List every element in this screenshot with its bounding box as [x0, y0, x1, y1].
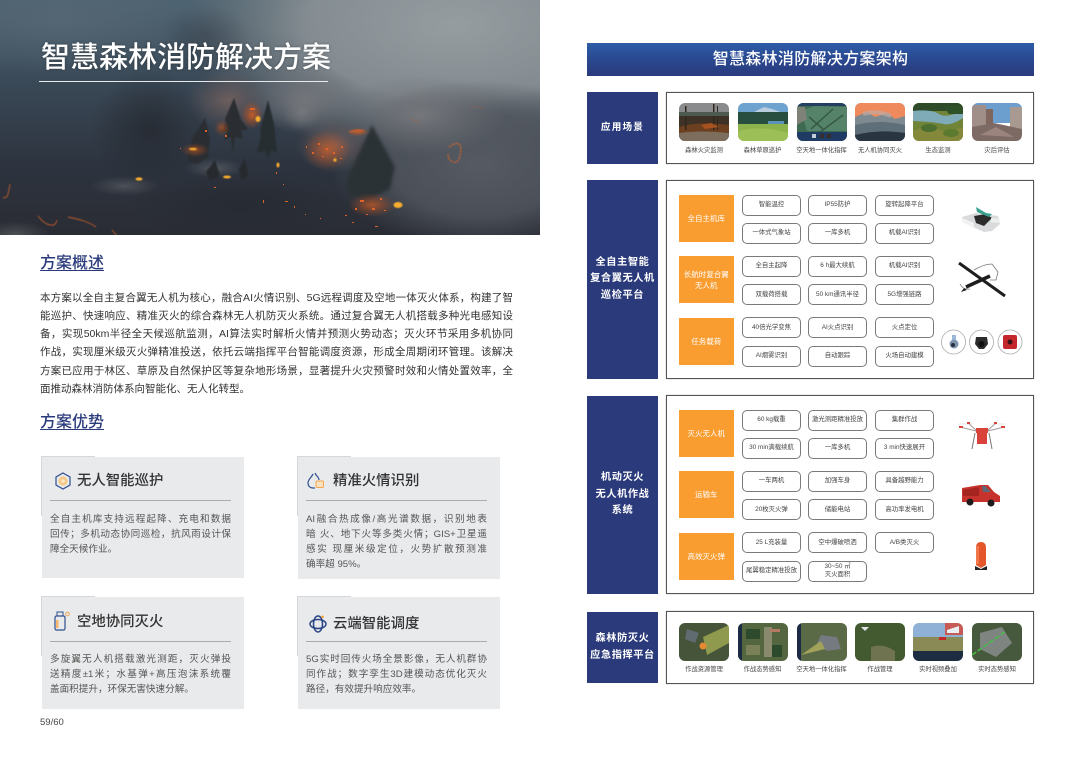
spec — [742, 438, 801, 458]
label: 作战管理 — [867, 666, 893, 673]
icon: orbit — [309, 615, 327, 633]
spec — [808, 346, 867, 366]
spec: 双载荷搭载 — [756, 290, 787, 298]
card text: 路径，有效提升响应效率。 — [306, 684, 421, 694]
icon: firefighting drone — [959, 422, 1005, 450]
spec: AI火点识别 — [822, 324, 853, 330]
block: transport vehicle: 运输车 — [695, 490, 718, 499]
spec: 60 kg载重 — [757, 416, 786, 423]
spec: 火点定位 — [892, 324, 917, 330]
spec — [875, 438, 934, 458]
card text: 送精度±1米；水基弹+高压泡沫系统覆 — [50, 668, 231, 680]
card heading: 精准火情识别 — [333, 473, 419, 489]
card text: AI融合热成像/高光谱数据，识别地表 — [306, 514, 487, 524]
block: long endurance drone: 无人机 — [695, 280, 718, 290]
panel: emergency command platform — [666, 611, 1034, 684]
spec: 30 min满载续航 — [749, 444, 794, 451]
spec: 储能电站 — [825, 506, 850, 512]
spec: 智能温控 — [759, 201, 784, 208]
thumbnail: situation awareness — [738, 623, 788, 661]
spec: 30~50 ㎡ — [824, 563, 851, 570]
card text — [306, 514, 487, 570]
spec — [808, 222, 867, 244]
card text: 5G实时回传火场全景影像，无人机群协 — [306, 654, 487, 664]
spec: 自动跟踪 — [825, 352, 850, 359]
spec — [742, 317, 801, 338]
spec — [875, 194, 934, 216]
title underline — [39, 80, 328, 82]
spec: 一车两机 — [759, 477, 784, 484]
block: fire bomb: 高效灭火弹 — [688, 552, 725, 561]
spec — [875, 222, 934, 244]
panel: card autonomous patrol — [42, 457, 244, 578]
thumbnail: live video overlay — [913, 623, 963, 661]
label: autonomous inspection platform — [587, 180, 658, 379]
spec: 尾翼稳定精准投放 — [746, 567, 797, 574]
panel: application scenes — [666, 92, 1034, 164]
spec — [875, 470, 934, 492]
spec — [808, 194, 867, 216]
panel: card fire identification — [298, 457, 500, 579]
block: firefighting drone — [678, 410, 734, 457]
spec: 20枚灭火弹 — [755, 506, 788, 512]
spec — [808, 438, 867, 458]
label: 无人机协同灭火 — [858, 147, 902, 154]
spec: 集群作战 — [892, 416, 917, 423]
spec: AI烟雾识别 — [756, 352, 787, 359]
spec — [742, 284, 801, 305]
label: application scenes — [587, 92, 658, 164]
label: application scenes: 应用场景 — [601, 122, 644, 133]
spec — [742, 256, 801, 276]
spec — [742, 194, 801, 216]
block: long endurance drone — [678, 256, 734, 303]
card heading: 云端智能调度 — [333, 616, 419, 632]
divider — [306, 500, 487, 501]
block: firefighting drone: 灭火无人机 — [688, 429, 725, 438]
thumbnail: post-disaster assessment — [972, 103, 1022, 141]
spec — [742, 222, 801, 244]
spec — [742, 346, 801, 366]
icon: drone dock — [962, 207, 1000, 232]
block: long endurance drone: 长航时复合翼 — [684, 270, 729, 278]
card text: 全自主机库支持远程起降、充电和数据 — [50, 514, 231, 524]
spec: 一库多机 — [825, 444, 850, 451]
card text: 回传；多机动态协同巡检，抗风雨设计保 — [50, 528, 231, 540]
card text: 同作战；数字孪生3D建模动态优化灭火 — [306, 668, 487, 680]
block: mission payload — [678, 318, 734, 365]
card text: 障全天候作业。 — [50, 544, 117, 554]
architecture title banner: 智慧森林消防解决方案架构 — [713, 51, 908, 68]
block: mission payload: 任务载荷 — [691, 337, 721, 346]
spec — [808, 410, 867, 430]
fire glow — [241, 101, 263, 129]
spec — [808, 317, 867, 338]
thumbnail: forest fire monitoring — [679, 103, 729, 141]
label: 灾后评估 — [984, 147, 1010, 154]
spec — [808, 470, 867, 492]
label: mobile firefighting system: 无人机作战 — [596, 489, 649, 500]
spec — [875, 499, 934, 520]
spec: 火场自动建模 — [885, 352, 924, 359]
thumbnail: resource management — [679, 623, 729, 661]
card text — [50, 654, 231, 694]
text block: overview paragraph: 备，实现50km半径全天候巡航监测，AI算法实时解析火情并预测火势动态；灭火环节采用多机协同 — [40, 328, 513, 340]
label: 森林火灾监测 — [685, 147, 723, 154]
spec: 一库多机 — [825, 229, 850, 236]
text block: overview paragraph: 能巡护、快速响应、精准灭火的综合森林无人机防灭火系统。通过复合翼无人机搭载多种光电感知设 — [40, 310, 513, 322]
architecture title banner — [587, 43, 1034, 76]
spec — [875, 284, 934, 305]
label: 生态监测 — [925, 147, 951, 154]
spec — [742, 532, 801, 553]
spec — [808, 284, 867, 305]
page number: 59/60 — [40, 717, 64, 728]
spec: 6 h最大续航 — [820, 262, 855, 269]
icon: hexagon — [55, 472, 71, 490]
heading: advantages: 方案优势 — [40, 414, 104, 431]
spec — [742, 560, 801, 582]
card heading: 空地协同灭火 — [77, 614, 163, 630]
spec: 灭火面积 — [825, 571, 850, 578]
spec: A/B类灭火 — [890, 538, 919, 546]
spec — [742, 499, 801, 520]
label: autonomous inspection platform: 全自主智能 — [596, 257, 649, 268]
spec: 5G增强链路 — [887, 290, 922, 298]
icon: fire bomb — [975, 542, 987, 570]
thumbnail: grassland protection — [738, 103, 788, 141]
panel: autonomous inspection platform — [666, 180, 1034, 379]
spec: 全自主起降 — [756, 262, 787, 269]
spec: 机载AI识别 — [889, 229, 920, 236]
block: airport: 全自主机库 — [688, 214, 725, 223]
spec — [742, 470, 801, 492]
label: autonomous inspection platform: 复合翼无人机 — [590, 273, 655, 284]
spec: 3 min快速展开 — [884, 444, 925, 451]
card text — [306, 654, 487, 694]
spec: 机载AI识别 — [889, 262, 920, 269]
spec: 加强车身 — [825, 477, 850, 484]
spec — [808, 560, 867, 582]
panel: card cloud dispatch — [298, 597, 500, 709]
label: autonomous inspection platform: 巡检平台 — [601, 290, 644, 301]
text block: overview paragraph — [40, 292, 513, 395]
spec — [875, 317, 934, 338]
heading: overview: 方案概述 — [40, 255, 104, 272]
spec: 一体式气象站 — [752, 229, 791, 236]
title: 智慧森林消防解决方案 — [41, 42, 331, 74]
label: emergency command platform: 森林防灭火 — [596, 633, 649, 644]
text block: overview paragraph: 方案已应用于林区、草原及自然保护区等复杂地形场景，显著提升火灾预警时效和火情处置效率，全 — [40, 365, 513, 377]
spec: IP55防护 — [825, 201, 850, 208]
card heading: 无人智能巡护 — [77, 473, 163, 489]
panel: mobile firefighting system — [666, 395, 1034, 594]
spec: 具备越野能力 — [885, 477, 924, 484]
icon: flame — [307, 472, 324, 489]
spec: 50 km通讯半径 — [816, 290, 859, 298]
divider — [50, 641, 231, 642]
spec — [875, 346, 934, 366]
card text: 多旋翼无人机搭载激光测距，灭火弹投 — [50, 654, 231, 664]
card text: 盖面积提升，环保无害快速分解。 — [50, 684, 194, 694]
label: mobile firefighting system: 系统 — [612, 505, 633, 516]
thumbnail: battle management — [855, 623, 905, 661]
card text: 感实 现厘米级定位，火势扩散预测准 — [306, 544, 487, 555]
label: 实时态势感知 — [978, 666, 1016, 673]
icon: vtol drone — [958, 262, 1006, 298]
label: 作战资源管理 — [685, 666, 723, 673]
spec: 旋转起降平台 — [885, 201, 924, 208]
icon: transport van — [962, 485, 1000, 506]
text block: overview paragraph: 本方案以全自主复合翼无人机为核心，融合AI火情识别、5G远程调度及空地一体灭火体系，构建了智 — [40, 292, 513, 304]
label: mobile firefighting system: 机动灭火 — [601, 472, 644, 483]
spec — [875, 256, 934, 276]
spec: 空中爆破喷洒 — [818, 538, 857, 546]
spec: 激光测距精准投放 — [812, 416, 863, 423]
divider — [306, 641, 487, 642]
card text: 确率超 95%。 — [306, 559, 366, 570]
icon: canister — [54, 612, 70, 631]
label: 空天地一体化指挥 — [796, 666, 847, 673]
spec — [742, 410, 801, 430]
thumbnail: integrated command — [797, 103, 847, 141]
spec — [808, 532, 867, 553]
spec: 40倍光学变焦 — [752, 324, 791, 330]
label: emergency command platform: 应急指挥平台 — [590, 650, 655, 660]
block: fire bomb — [678, 533, 734, 580]
spec — [808, 256, 867, 276]
label: mobile firefighting system — [587, 396, 658, 594]
hero photo: forest fire — [0, 0, 540, 235]
thumbnail: integrated command — [797, 623, 847, 661]
spec — [875, 410, 934, 430]
thumbnail: ecological monitoring — [913, 103, 963, 141]
label: 实时视频叠加 — [919, 666, 957, 673]
spec — [875, 532, 934, 553]
thumbnail: realtime awareness — [972, 623, 1022, 661]
label: emergency command platform — [587, 612, 658, 683]
divider — [50, 500, 231, 501]
card text — [50, 514, 231, 554]
label: 空天地一体化指挥 — [796, 147, 847, 154]
icon group: payload circles — [941, 330, 1022, 354]
label: 森林草原巡护 — [744, 147, 781, 154]
thumbnail: coordinated firefighting — [855, 103, 905, 141]
label: 作战态势感知 — [744, 666, 781, 673]
text block: overview paragraph: 作战，实现厘米级灭火弹精准投送，依托云端指挥平台智能调度资源，形成全周期闭环管理。该解决 — [40, 346, 513, 358]
spec — [808, 499, 867, 520]
spec: 25 L充装量 — [756, 538, 787, 546]
spec: 高功率发电机 — [885, 506, 924, 512]
panel: card air-ground firefighting — [42, 597, 244, 709]
block: airport — [678, 195, 734, 242]
block: transport vehicle — [678, 471, 734, 518]
trees — [187, 98, 277, 181]
card text: 暗 火、地下火等多类火情；GIS+卫星遥 — [306, 528, 487, 540]
text block: overview paragraph: 面推动森林消防体系向智能化、无人化转型。 — [40, 383, 250, 395]
